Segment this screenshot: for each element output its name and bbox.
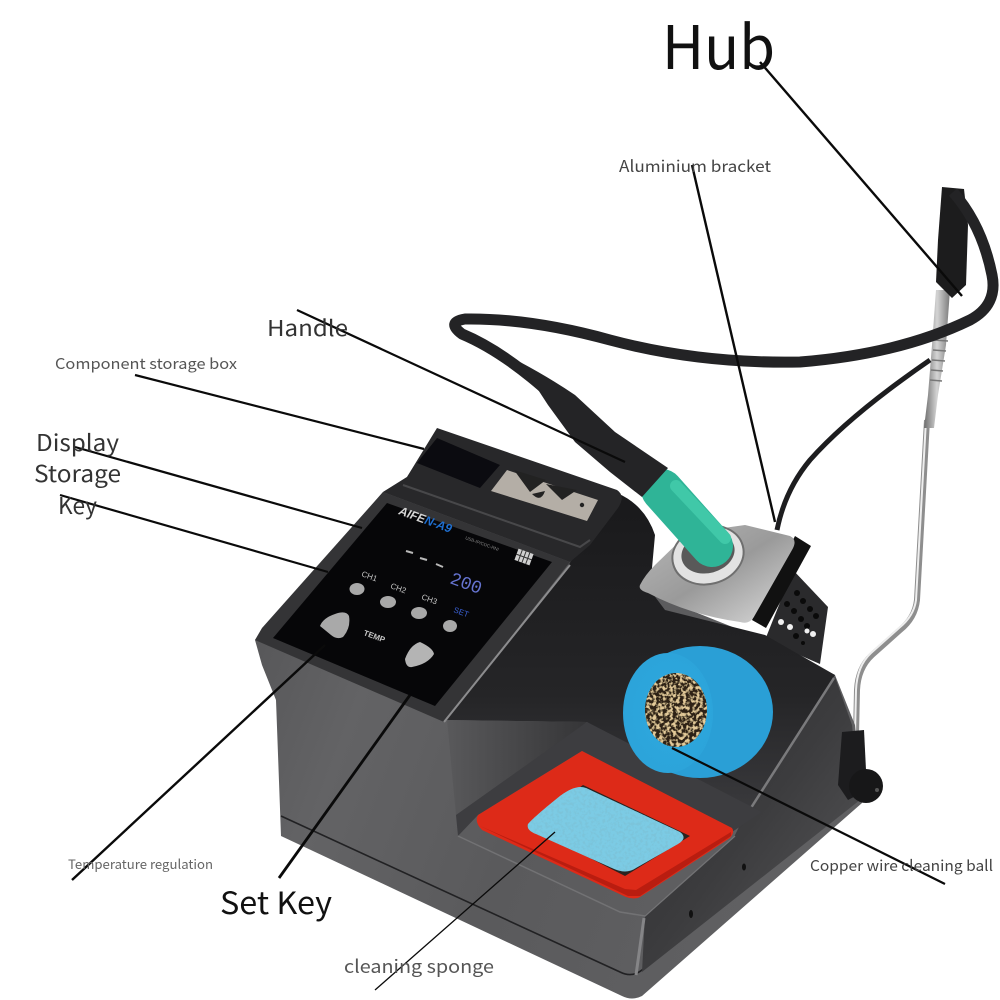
right side face [642,677,860,972]
channel buttons [350,583,457,632]
platform silver crease [742,678,834,822]
tray recess [456,722,762,836]
control panel bezel [255,492,570,722]
temperature readout: 200 [447,570,484,600]
perforated rear vent panel [765,570,828,664]
temperature down button [320,612,349,638]
button labels: SET [452,605,470,619]
label: Set Key: Set Key [220,878,332,923]
lower lip crease [281,790,858,975]
bracket dark back edge [752,536,811,628]
cable [455,192,993,440]
component storage slot [417,438,500,488]
label: Key: Key [58,487,97,521]
stand: black holder head [936,187,968,298]
temperature up button [405,642,434,667]
copper wire cleaning ball [645,673,707,747]
label: Temperature regulation: Temperature regulation [68,854,213,873]
button labels: CH2 [389,581,408,596]
red tray [477,751,733,898]
button labels: CH1 [360,569,379,584]
display dashes [406,551,443,567]
label: Display: Display [36,424,119,458]
label: cleaning sponge: cleaning sponge [344,953,494,979]
control panel glass [273,503,552,706]
label: Hub: Hub [662,0,775,87]
tray floor edge [458,836,735,916]
screw holes [689,864,746,918]
soldering tip card [491,470,598,521]
button labels: CH3 [420,592,439,607]
sleeve highlight [676,486,725,538]
label: Component storage box: Component storage box [55,353,238,374]
aluminium bracket [640,525,795,623]
label: Copper wire cleaning ball: Copper wire cleaning ball [810,855,993,876]
neck lower wall [447,720,587,815]
front corner highlight [636,918,644,975]
stand: metal wire holder [855,290,950,735]
label: Aluminium bracket: Aluminium bracket [619,153,771,177]
button labels [360,569,470,645]
top storage housing [383,428,622,562]
brand text: AIFEN-A9 [396,503,454,536]
green handle sleeve [662,490,712,546]
station body silhouette [255,430,862,998]
thin rear cable [777,360,930,530]
button labels: TEMP [362,628,387,645]
label: Storage: Storage [34,455,121,489]
blue silicone holder [623,646,773,778]
logo mark [514,549,534,565]
neck silver edge [444,565,570,722]
label: Handle: Handle [267,311,348,343]
stand knob [838,730,883,803]
icon: threaded metal tube [924,290,950,428]
blue cleaning sponge [528,787,684,872]
model line text: USB-IP/CDC-RNI [465,535,500,552]
bracket socket ring [666,518,750,592]
dark neck and platform [447,493,835,830]
dark handle grip [520,362,668,497]
